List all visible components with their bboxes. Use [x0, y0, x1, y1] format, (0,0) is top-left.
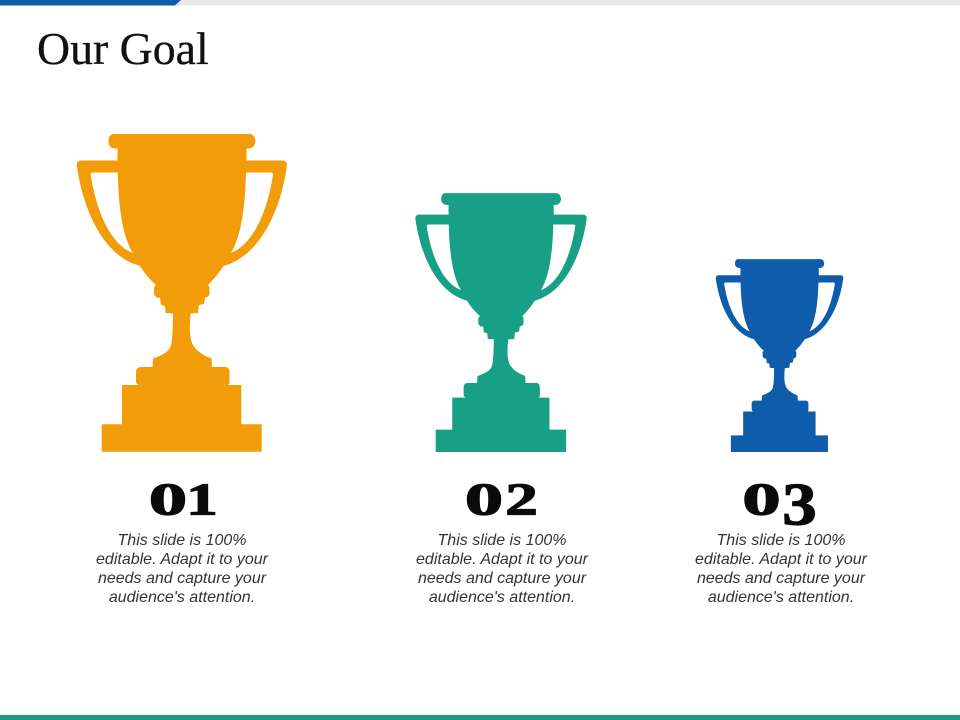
- icon: orange trophy: [77, 134, 287, 452]
- text block 3: editable. Adapt it to your: [695, 551, 867, 568]
- text block 3: audience's attention.: [708, 589, 854, 606]
- number 03: [742, 471, 817, 537]
- text block 1: audience's attention.: [109, 589, 255, 606]
- text block 2: needs and capture your: [418, 570, 586, 587]
- number 02: 2: [505, 475, 538, 525]
- text block 1: This slide is 100%: [118, 532, 246, 548]
- number 01: 1: [186, 474, 218, 524]
- text block 3: This slide is 100%: [717, 532, 845, 548]
- text block 3: [695, 532, 868, 606]
- number 01: 0: [149, 474, 187, 525]
- icon: green trophy: [415, 193, 587, 452]
- number 02: 0: [465, 474, 503, 525]
- top accent bar: [0, 0, 960, 6]
- number 03: 0: [742, 474, 781, 525]
- text block 1: [96, 532, 268, 606]
- bottom accent bar: [0, 715, 960, 720]
- icon: blue trophy: [716, 259, 843, 452]
- text block 3: needs and capture your: [697, 570, 865, 587]
- text block 1: editable. Adapt it to your: [96, 551, 268, 568]
- number 02: [465, 474, 538, 525]
- text block 2: editable. Adapt it to your: [416, 551, 588, 568]
- title: Our Goal: [37, 23, 209, 74]
- text block 2: audience's attention.: [429, 589, 575, 606]
- text block 2: This slide is 100%: [438, 532, 566, 548]
- number 01: [149, 474, 218, 525]
- number 03: 3: [782, 471, 817, 537]
- text block 2: [416, 532, 588, 606]
- text block 1: needs and capture your: [98, 570, 266, 587]
